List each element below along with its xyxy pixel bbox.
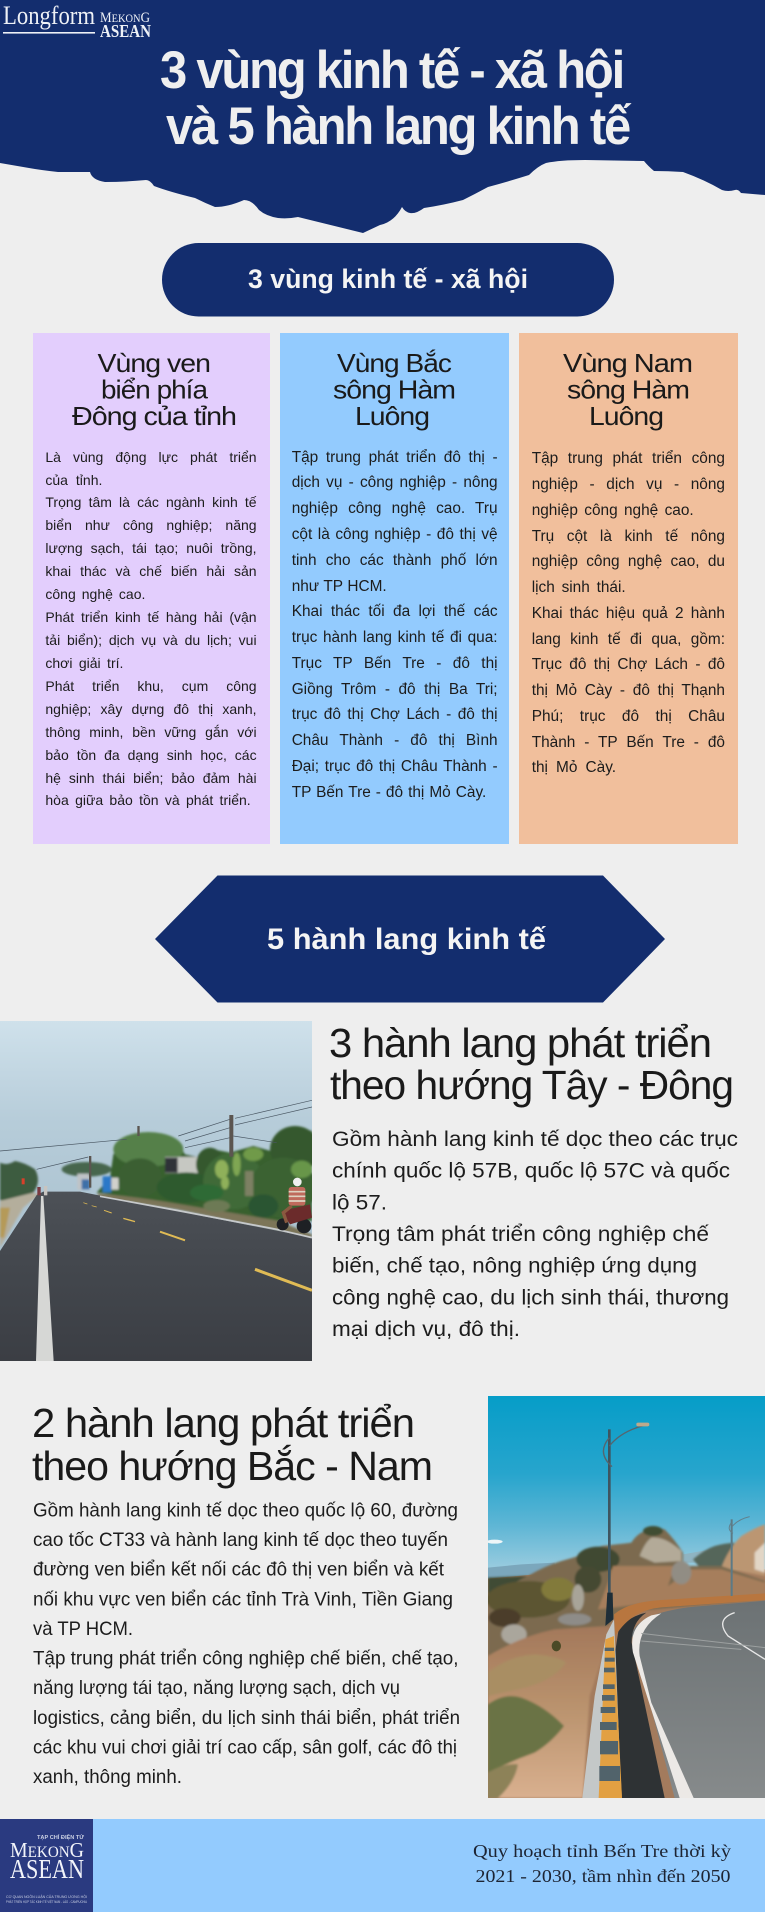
- panel heading: Vùng Bắc: [337, 348, 452, 378]
- panel text: Châu Thành - đô thị Bình: [292, 732, 498, 749]
- panel heading: Vùng Nam: [563, 348, 692, 378]
- title: và 5 hành lang kinh tế: [166, 97, 632, 156]
- heading: 2 hành lang: 2 hành lang phát triển: [32, 1400, 414, 1446]
- text block: 3 hành lang: công nghệ cao, du lịch sinh thái, thương: [332, 1285, 729, 1309]
- panel heading: sông Hàm: [567, 374, 689, 404]
- footer logo: Mekong ASEAN: [0, 1819, 93, 1912]
- panel text: thông minh, bền vững gắn với: [45, 724, 257, 740]
- text block: 2 hành lang: xanh, thông minh.: [33, 1766, 182, 1788]
- logo: Longform Mekong ASEAN: MEKONG: [100, 10, 150, 26]
- logo: Longform Mekong ASEAN: ASEAN: [100, 21, 151, 41]
- panel text: Phát triển kinh tế hàng hải (vận: [45, 609, 257, 625]
- panel text: nghiệp công nghệ cao.: [532, 502, 694, 519]
- footer logo: Mekong ASEAN: MEKONG: [10, 1838, 84, 1862]
- footer logo: Mekong ASEAN: TẠP CHÍ ĐIỆN TỬ: [37, 1833, 84, 1841]
- panel text: thị Mỏ Cày.: [532, 759, 616, 776]
- panel text: Trụ cột là kinh tế nông: [532, 528, 725, 545]
- panel heading: sông Hàm: [333, 374, 455, 404]
- text block: 2 hành lang: Gồm hành lang kinh tế dọc theo quốc lộ 60, đường: [33, 1499, 458, 1521]
- panel heading: Luông: [589, 401, 663, 431]
- panel text: nghiệp; xây dựng đô thị xanh,: [45, 701, 257, 717]
- logo: Longform Mekong ASEAN: [3, 1, 151, 41]
- panel text: dịch vụ - công nghiệp - nông: [292, 474, 498, 491]
- panel text: Tập trung phát triển đô thị -: [292, 449, 498, 466]
- panel text: trục đô thị Chợ Lách - đô thị: [292, 706, 498, 723]
- panel: Vùng ven biển phía Đông của tỉnh: [33, 333, 270, 844]
- text block: 2 hành lang: đường ven biển kết nối các đô thị ven biển và kết: [33, 1559, 445, 1581]
- panel text: lang kinh tế đi qua, gồm:: [532, 631, 725, 648]
- text block: 2 hành lang: [33, 1499, 460, 1788]
- header banner: [0, 0, 765, 233]
- heading: 2 hành lang: [32, 1400, 432, 1489]
- text block: 2 hành lang: năng lượng tái tạo, năng lượng sạch, dịch vụ: [33, 1677, 400, 1699]
- panel text: khai thác và chế biến hải sản: [45, 563, 257, 579]
- text block: 2 hành lang: các khu vui chơi giải trí cao cấp, sân golf, các đô thị: [33, 1736, 457, 1758]
- section hexagon: 5 hành lang kinh tế: 5 hành lang kinh tế: [267, 923, 546, 956]
- title: 3 vùng kinh tế - xã hội: [160, 41, 623, 100]
- footer bar: [0, 1819, 765, 1912]
- panel text: Đại; trục đô thị Châu Thành -: [292, 758, 498, 775]
- panel text: nghiệp công nghệ cao. Trụ: [292, 500, 498, 517]
- panel text: [292, 449, 498, 801]
- text block: 3 hành lang: Gồm hành lang kinh tế dọc theo các trục: [332, 1127, 738, 1151]
- footer caption: Quy hoạch tỉnh Bến Tre thời kỳ: [473, 1841, 731, 1861]
- panel heading: biển phía: [101, 374, 209, 404]
- panel text: Tập trung phát triển công: [532, 450, 725, 467]
- text block: 3 hành lang: Trọng tâm phát triển công nghiệp chế: [332, 1222, 709, 1246]
- text block: 3 hành lang: [332, 1127, 738, 1341]
- panel text: Trục TP Bến Tre - đô thị: [292, 655, 498, 672]
- footer caption: [473, 1841, 731, 1886]
- panel text: trục hành lang kinh tế đi qua:: [292, 629, 498, 646]
- text block: 2 hành lang: cao tốc CT33 và hành lang kinh tế dọc theo tuyến: [33, 1529, 448, 1551]
- footer logo: Mekong ASEAN: PHÁT TRIỂN HỢP TÁC KINH TẾ VIỆT NAM - LÀO - CAMPUCHIA: [6, 1899, 87, 1904]
- panel text: hòa giữa bảo tồn và phát triển.: [45, 792, 251, 808]
- heading: 3 hành lang: theo hướng Tây - Đông: [330, 1062, 733, 1108]
- section hexagon: 5 hành lang kinh tế: [155, 876, 665, 1002]
- panel text: chơi giải trí.: [45, 655, 123, 671]
- panel text: cột là công nghiệp - đô thị vệ: [292, 526, 498, 543]
- text block: 3 hành lang: chính quốc lộ 57B, quốc lộ 57C và quốc: [332, 1159, 730, 1183]
- text block: 2 hành lang: Tập trung phát triển công nghiệp chế biến, chế tạo,: [33, 1648, 458, 1670]
- panel text: Khai thác tối đa lợi thế các: [292, 603, 498, 620]
- panel text: Giồng Trôm - đô thị Ba Tri;: [292, 681, 498, 698]
- panel text: Khai thác hiệu quả 2 hành: [532, 605, 725, 622]
- heading: 3 hành lang: 3 hành lang phát triển: [329, 1020, 711, 1066]
- text block: 2 hành lang: nối khu vực ven biển các tỉnh Trà Vinh, Tiền Giang: [33, 1588, 453, 1610]
- panel text: Thành - TP Bến Tre - đô: [532, 734, 725, 751]
- heading: 3 hành lang: [329, 1020, 733, 1108]
- section pill: 3 vùng kinh tế - xã hội: [162, 243, 614, 316]
- title: [160, 41, 632, 156]
- panel text: bảo tồn đa dạng sinh học, các: [45, 747, 257, 763]
- panel heading: Đông của tỉnh: [72, 401, 236, 431]
- panel text: [532, 450, 725, 776]
- panel text: lượng sạch, tái tạo; nuôi trồng,: [45, 540, 257, 556]
- panel text: thị Mỏ Cày - đô thị Thạnh: [532, 682, 725, 699]
- panel text: Trọng tâm là các ngành kinh tế: [45, 494, 257, 510]
- panel text: nghiệp - dịch vụ - nông: [532, 476, 725, 493]
- section pill: 3 vùng kinh tế - xã hội: 3 vùng kinh tế - xã hội: [248, 264, 528, 294]
- footer logo: Mekong ASEAN: ASEAN: [10, 1854, 84, 1884]
- panel heading: [333, 348, 455, 431]
- photo: road west-east: [0, 1021, 320, 1361]
- panel heading: [563, 348, 692, 431]
- panel heading: Luông: [355, 401, 429, 431]
- panel text: Trục đô thị Chợ Lách - đô: [532, 656, 725, 673]
- heading: 2 hành lang: theo hướng Bắc - Nam: [32, 1443, 432, 1489]
- footer caption: 2021 - 2030, tầm nhìn đến 2050: [476, 1866, 730, 1886]
- panel text: công nghệ cao.: [45, 586, 145, 602]
- panel: Vùng Bắc sông Hàm Luông: [280, 333, 509, 844]
- panel text: lịch sinh thái.: [532, 579, 626, 596]
- panel: Vùng Nam sông Hàm Luông: [519, 333, 738, 844]
- panel text: biển như công nghiệp; năng: [45, 517, 257, 533]
- panel text: tải biển); dịch vụ và du lịch; vui: [45, 632, 257, 648]
- text block: 2 hành lang: và TP HCM.: [33, 1618, 133, 1640]
- text block: 3 hành lang: biến, chế tạo, nông nghiệp ứng dụng: [332, 1254, 697, 1278]
- panel heading: [72, 348, 236, 431]
- panel text: Là vùng động lực phát triển: [45, 449, 257, 465]
- photo: mountain road north-south: [486, 1396, 765, 1798]
- panel text: Phú; trục đô thị Châu: [532, 708, 725, 725]
- panel text: của tỉnh.: [45, 472, 102, 488]
- panel text: nghiệp công nghệ cao, du: [532, 553, 725, 570]
- panel heading: Vùng ven: [98, 348, 210, 378]
- panel text: tinh cho các thành phố lớn: [292, 552, 498, 569]
- text block: 2 hành lang: logistics, cảng biển, du lịch sinh thái biển, phát triển: [33, 1707, 460, 1729]
- panel text: hệ sinh thái biển; bảo đảm hài: [45, 770, 257, 786]
- motorbike: [277, 1178, 312, 1233]
- panel text: [45, 449, 257, 808]
- panel text: TP Bến Tre - đô thị Mỏ Cày.: [292, 784, 486, 801]
- text block: 3 hành lang: lộ 57.: [332, 1190, 387, 1214]
- text block: 3 hành lang: mại dịch vụ, đô thị.: [332, 1317, 520, 1341]
- footer logo: Mekong ASEAN: CƠ QUAN NGÔN LUẬN CỦA TRUNG ƯƠNG HỘI: [6, 1894, 87, 1899]
- logo: Longform Mekong ASEAN: Longform: [3, 1, 95, 30]
- panel text: Phát triển khu, cụm công: [45, 678, 257, 694]
- panel text: như TP HCM.: [292, 578, 387, 595]
